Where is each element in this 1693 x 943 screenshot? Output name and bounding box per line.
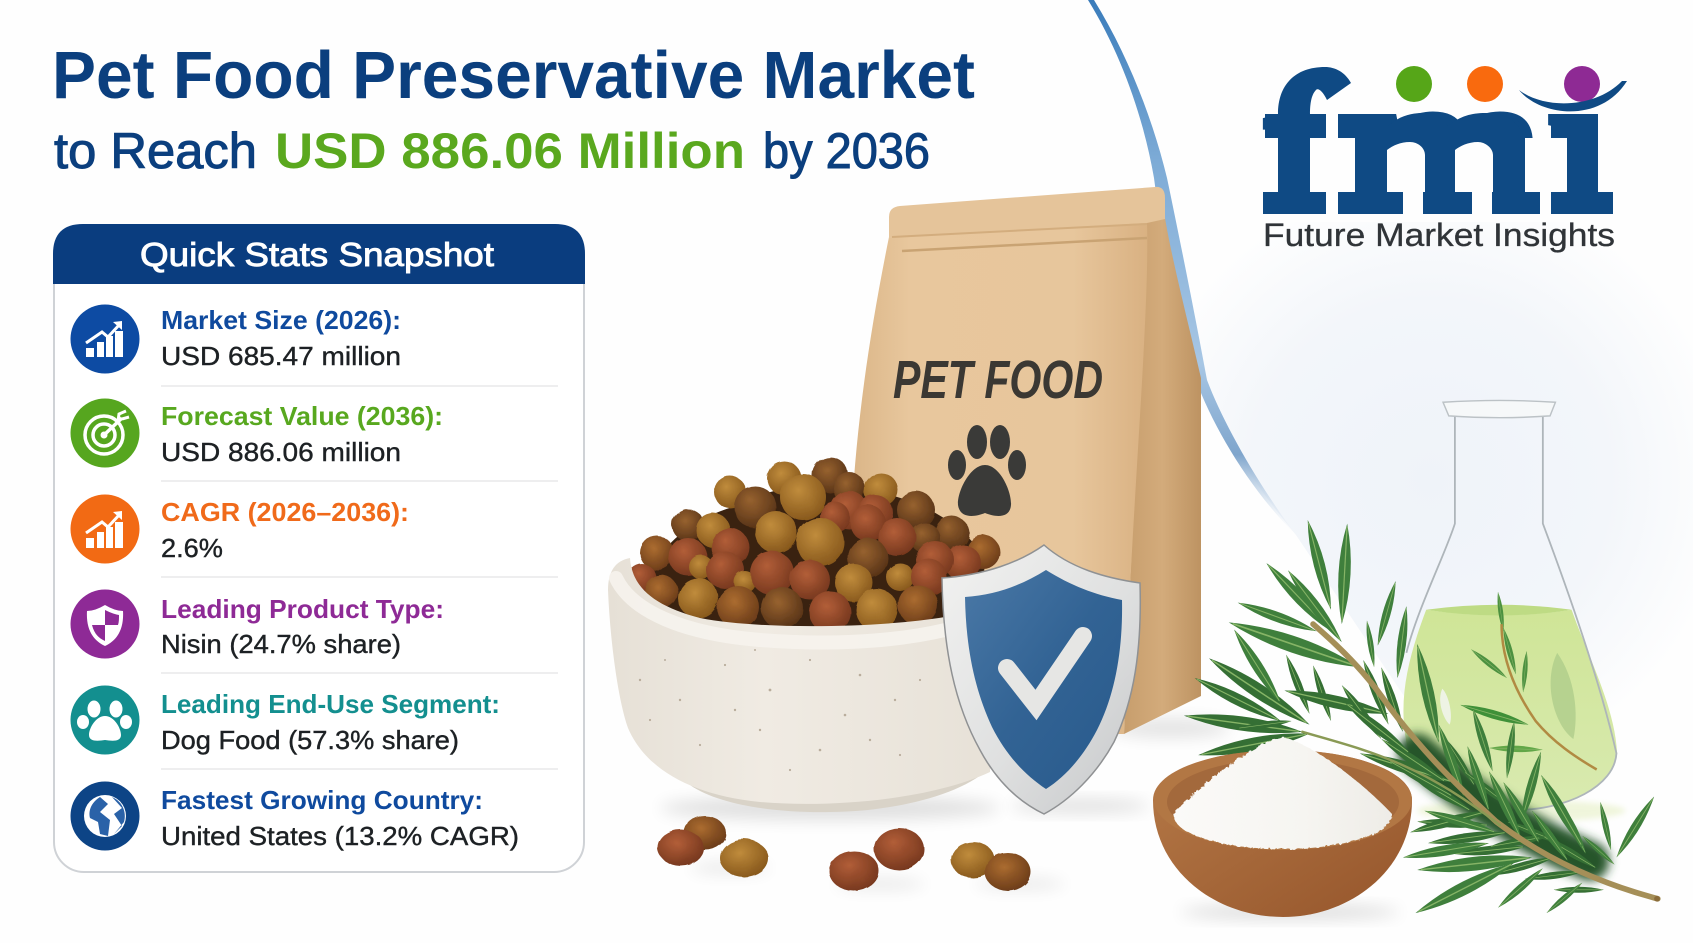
- logo: future market insights: fmi: [1264, 27, 1612, 257]
- logo: future market insights: Future Market Insights: [1263, 217, 1615, 253]
- ceramic bowl body: [608, 558, 1000, 812]
- stat: leading end-use segment: Dog Food (57.3% share): [161, 725, 459, 755]
- stat: cagr: CAGR (2026–2036):: [161, 497, 409, 527]
- pet food bag: [850, 187, 1230, 738]
- bag label: PET FOOD: [893, 350, 1103, 410]
- title: by 2036: [763, 123, 930, 179]
- stat: market size: Market Size (2026):: [161, 305, 401, 335]
- stat: fastest growing country: United States (13.2% CAGR): [161, 821, 519, 851]
- wooden bowl of preservative powder: [1153, 737, 1412, 919]
- rosemary branch: [1183, 519, 1660, 919]
- stat: leading end-use segment: [70, 686, 500, 755]
- stat: cagr: [70, 494, 409, 564]
- stat: forecast value: [70, 398, 443, 468]
- stat: forecast value: USD 886.06 million: [161, 437, 401, 467]
- title: Pet Food Preservative Market: [52, 38, 975, 113]
- kibble pile: [628, 457, 1000, 633]
- sprig inside flask: [1459, 591, 1597, 770]
- panel header: [53, 224, 585, 284]
- title: to Reach: [54, 123, 257, 179]
- stat: market size: [70, 304, 401, 374]
- stat: forecast value: Forecast Value (2036):: [161, 401, 443, 431]
- panel header: Quick Stats Snapshot: [140, 236, 494, 273]
- glass flask with oil: [1403, 400, 1625, 822]
- stat: leading end-use segment: Leading End-Use Segment:: [161, 689, 500, 719]
- title: [52, 38, 975, 179]
- background tint: [1227, 268, 1642, 690]
- loose kibble: [658, 816, 1065, 891]
- stat: leading product type: [70, 590, 444, 659]
- stat: leading product type: Nisin (24.7% share): [161, 629, 401, 659]
- stat: market size: USD 685.47 million: [161, 341, 401, 371]
- title: USD 886.06 Million: [275, 123, 745, 179]
- stat: fastest growing country: Fastest Growing Country:: [161, 785, 483, 815]
- kibble bowl: [608, 457, 1000, 820]
- stat: cagr: 2.6%: [161, 533, 223, 563]
- powder mound: [1173, 737, 1392, 849]
- icon: paw print: [948, 425, 1026, 516]
- shield with checkmark: [942, 545, 1150, 814]
- icon: checkmark: [1007, 636, 1083, 705]
- blue curve: [1088, 0, 1296, 535]
- stat: fastest growing country: [70, 782, 519, 851]
- panel: quick stats snapshot: [53, 224, 585, 872]
- stat: leading product type: Leading Product Type:: [161, 594, 444, 624]
